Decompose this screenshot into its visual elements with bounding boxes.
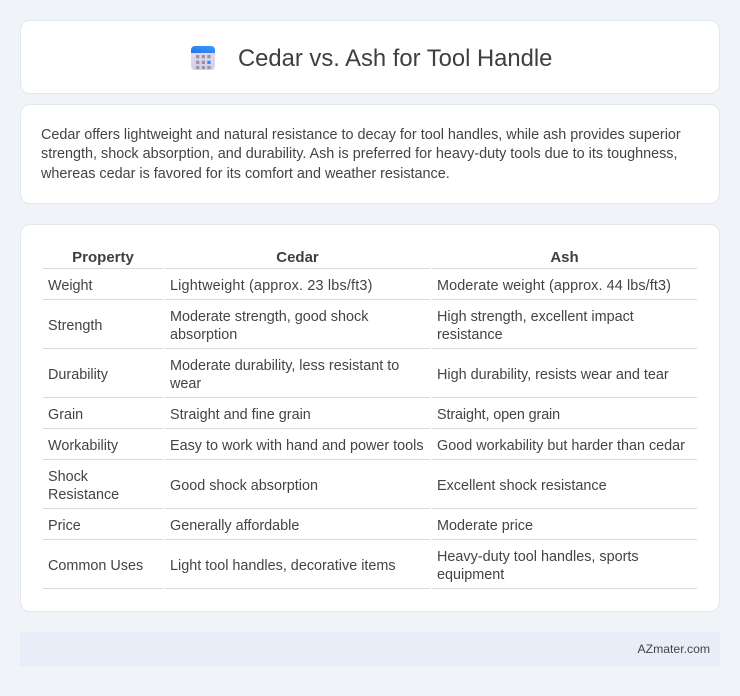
comparison table: Moderate strength, good shock xyxy=(170,309,368,325)
comparison table panel xyxy=(20,224,720,612)
footer bar xyxy=(20,632,720,666)
table header xyxy=(72,249,579,266)
comparison table: Common Uses xyxy=(48,558,143,574)
comparison table: absorption xyxy=(170,327,237,343)
comparison table: Straight, open grain xyxy=(437,407,560,423)
comparison table: equipment xyxy=(437,567,504,583)
comparison table: wear xyxy=(170,376,201,392)
comparison table: Cedar xyxy=(276,249,319,266)
icon: calendar xyxy=(191,46,215,70)
comparison table: Moderate price xyxy=(437,518,533,534)
comparison table: Price xyxy=(48,518,81,534)
row: strength xyxy=(48,309,634,343)
comparison table: Heavy-duty tool handles, sports xyxy=(437,549,639,565)
summary text: whereas cedar is favored for its comfort and weather resistance. xyxy=(41,166,450,182)
comparison table: High strength, excellent impact xyxy=(437,309,634,325)
comparison table: Straight and fine grain xyxy=(170,407,311,423)
comparison table: Strength xyxy=(48,318,102,334)
comparison table: Good shock absorption xyxy=(170,478,318,494)
comparison table: Light tool handles, decorative items xyxy=(170,558,396,574)
row: grain xyxy=(48,407,560,423)
comparison table: Property xyxy=(72,249,134,266)
comparison table: Shock xyxy=(48,469,88,485)
row: workability xyxy=(48,438,685,454)
footer credit: AZmater.com xyxy=(638,642,710,656)
summary card xyxy=(20,104,720,204)
comparison table: Resistance xyxy=(48,487,119,503)
comparison table: Generally affordable xyxy=(170,518,299,534)
comparison table: resistance xyxy=(437,327,503,343)
comparison table: Durability xyxy=(48,367,108,383)
comparison table: Workability xyxy=(48,438,118,454)
row: shock resistance xyxy=(48,469,607,503)
comparison table: Easy to work with hand and power tools xyxy=(170,438,424,454)
summary text: Cedar offers lightweight and natural resistance to decay for tool handles, while ash provides superior xyxy=(41,127,681,143)
comparison table: Good workability but harder than cedar xyxy=(437,438,685,454)
comparison table: Grain xyxy=(48,407,83,423)
comparison table: Excellent shock resistance xyxy=(437,478,607,494)
summary text xyxy=(41,127,681,182)
comparison table: High durability, resists wear and tear xyxy=(437,367,669,383)
row: durability xyxy=(48,358,669,392)
row: weight xyxy=(48,278,671,294)
comparison table: Moderate durability, less resistant to xyxy=(170,358,399,374)
summary text: strength, shock absorption, and durability. Ash is preferred for heavy-duty tools due to its toughness, xyxy=(41,146,677,162)
row: price xyxy=(48,518,533,534)
comparison table: Moderate weight (approx. 44 lbs/ft3) xyxy=(437,278,671,294)
header card xyxy=(20,20,720,94)
comparison table: Ash xyxy=(550,249,579,266)
row: common uses xyxy=(48,549,639,583)
comparison table: Weight xyxy=(48,278,93,294)
title: Cedar vs. Ash for Tool Handle xyxy=(238,45,552,72)
comparison table: Lightweight (approx. 23 lbs/ft3) xyxy=(170,278,373,294)
